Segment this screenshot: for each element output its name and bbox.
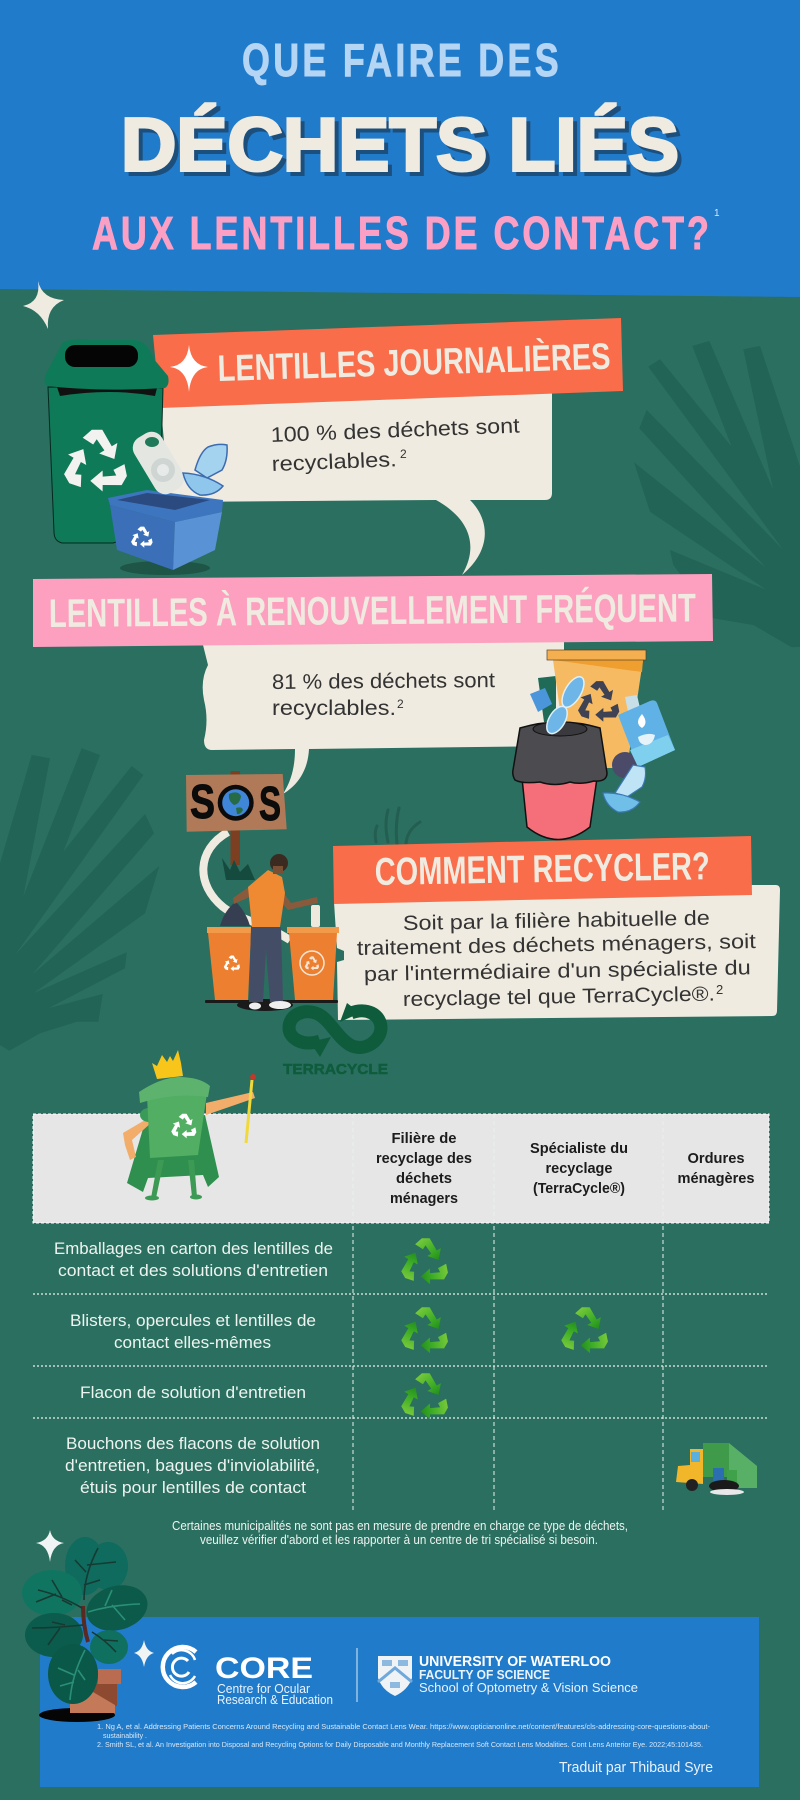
logo: University of Waterloo: FACULTY OF SCIENCE: [419, 1667, 550, 1682]
sparkle above plant: [36, 1530, 64, 1562]
body text: traitement des déchets ménagers, soit: [357, 930, 756, 960]
logo: CORE: Research & Education: [217, 1692, 333, 1707]
recycle sign: [168, 1114, 198, 1141]
sparkle near logo: [134, 1640, 154, 1667]
legs: [145, 1160, 202, 1200]
logo: TerraCycle: [283, 1003, 388, 1078]
sparkle top left: [23, 281, 64, 329]
board: [186, 774, 287, 832]
table grid: [33, 1114, 769, 1511]
title line 3: AUX LENTILLES DE CONTACT?: [92, 208, 709, 259]
orange banner: [333, 836, 752, 904]
panel: footer: [40, 1617, 759, 1787]
crown: [152, 1050, 183, 1079]
icon: solution bottle: [612, 695, 675, 778]
left bin: [208, 933, 251, 1000]
cream path behind sign and man: [203, 832, 290, 940]
body text: 2: [397, 697, 404, 711]
arm left: [123, 1117, 152, 1160]
recycle icons: [396, 1238, 611, 1424]
logo: TerraCycle: TERRACYCLE: [283, 1062, 388, 1078]
column heading 2: Spécialiste du: [530, 1140, 628, 1157]
column heading 1: ménagers: [390, 1190, 458, 1207]
shadow: [39, 1708, 115, 1722]
pencil: [246, 1080, 252, 1143]
panel: daily lenses: [153, 318, 623, 575]
logo: CORE: CORE: [215, 1652, 313, 1685]
icon: pink bin with black bag: [513, 722, 607, 840]
row labels: Bouchons des flacons de solution: [66, 1434, 320, 1453]
shoulder: [140, 1108, 158, 1122]
table header background: [33, 1114, 769, 1223]
column heading 3: Ordures: [688, 1150, 744, 1167]
logo: University of Waterloo: School of Optometry & Vision Science: [419, 1680, 638, 1695]
column heading 1: recyclage des: [376, 1150, 472, 1167]
row labels: Emballages en carton des lentilles de: [54, 1239, 333, 1258]
row labels: Flacon de solution d'entretien: [80, 1383, 306, 1402]
bottle: [311, 905, 320, 927]
arm right: [206, 1092, 255, 1115]
references: [97, 1722, 711, 1749]
stem: [83, 1606, 88, 1642]
column heading 3: [678, 1150, 754, 1187]
panel: frequent replacement lenses: [33, 574, 713, 794]
letters: S: [259, 778, 281, 831]
light leaf veins: [58, 1590, 140, 1700]
body text: 81 % des déchets sont: [272, 669, 495, 694]
table: [33, 1114, 769, 1511]
note: Certaines municipalités ne sont pas en mesure de prendre en charge ce type de déchets,: [172, 1519, 628, 1533]
globe: [218, 785, 254, 821]
pink banner: [33, 574, 713, 647]
leaves: [22, 1537, 153, 1704]
heading: LENTILLES JOURNALIÈRES: [217, 336, 611, 389]
illustration: potted plant: [22, 1537, 153, 1722]
translator credit: Traduit par Thibaud Syre: [559, 1759, 713, 1776]
column heading 3: ménagères: [678, 1170, 754, 1187]
icon: lens case: [183, 444, 227, 495]
ground shadow: [205, 1000, 338, 1003]
mascot: recycling bin superhero: [123, 1050, 256, 1200]
cape: [127, 1115, 219, 1192]
grass: [375, 808, 420, 844]
sparkle: [170, 345, 208, 392]
arms: [233, 887, 254, 904]
icon: garbage truck: [676, 1443, 757, 1495]
row labels: d'entretien, bagues d'inviolabilité,: [65, 1456, 320, 1475]
references: 1. Ng A, et al. Addressing Patients Concerns Around Recycling and Sustainable Contact Lens Wear. https://www.opticianonline.net/content/features/cls-addressing-core-questions-about-: [97, 1722, 711, 1731]
body text: par l'intermédiaire d'un spécialiste du: [364, 956, 751, 986]
references: 2. Smith SL, et al. An Investigation into Disposal and Recycling Options for Daily Disposable and Monthly Replacement Soft Contact Lens Modalities. Cont Lens Anterior Eye. 2022;45:101435.: [97, 1740, 703, 1749]
speech box: [334, 885, 780, 1020]
body text: [272, 669, 495, 720]
panel: how to recycle: [333, 836, 780, 1020]
body text: 100 % des déchets sont: [270, 414, 520, 447]
icon: yellow recycling bin: [530, 650, 646, 768]
pot: [70, 1669, 121, 1713]
post: [230, 771, 240, 865]
orange banner: [153, 318, 623, 408]
body text: recyclables.: [272, 697, 396, 720]
divider: [356, 1648, 358, 1702]
title line 2: DÉCHETS LIÉS: [121, 102, 679, 186]
body text: 2: [716, 982, 723, 997]
title line 1: QUE FAIRE DES: [242, 35, 559, 86]
icon: green recycling bin: [44, 339, 169, 543]
row labels: étuis pour lentilles de contact: [80, 1478, 306, 1497]
legs: [249, 927, 283, 1002]
lid: [139, 1077, 210, 1103]
title reference: 1: [714, 208, 720, 219]
column heading 1: déchets: [396, 1170, 452, 1187]
logo: University of Waterloo: [378, 1654, 638, 1696]
icon: blue recycling bin: [108, 490, 223, 575]
column heading 2: (TerraCycle®): [533, 1180, 625, 1197]
note: [172, 1519, 628, 1547]
logo: CORE: [163, 1647, 333, 1707]
illustration: man sorting waste: [205, 854, 339, 1011]
logo: University of Waterloo: UNIVERSITY OF WATERLOO: [419, 1654, 611, 1670]
title line 2: DÉCHETS LIÉS: [125, 106, 683, 190]
icon: lens case open: [603, 765, 646, 812]
bush: [222, 858, 255, 880]
row labels: contact et des solutions d'entretien: [58, 1261, 328, 1280]
body text: recyclables.: [271, 448, 397, 476]
speech box: [202, 640, 564, 794]
row labels: Blisters, opercules et lentilles de: [70, 1311, 316, 1330]
decorative palm leaves left: [0, 748, 159, 1051]
column heading 1: Filière de: [392, 1130, 456, 1147]
note: veuillez vérifier d'abord et les rapporter à un centre de tri spécialisé si besoin.: [200, 1533, 598, 1547]
body text: Soit par la filière habituelle de: [403, 907, 710, 935]
letters: S: [190, 776, 215, 829]
body text: [270, 414, 520, 476]
header band: [0, 0, 800, 297]
icon: blister strip: [543, 673, 588, 737]
references: sustainability .: [103, 1731, 147, 1740]
trash bag: [220, 902, 250, 926]
dark leaf veins: [32, 1548, 118, 1652]
column heading 1: [376, 1130, 472, 1207]
torso: [248, 870, 285, 927]
decorative palm leaves top right: [634, 341, 800, 647]
icon: blister pack: [128, 427, 189, 499]
body text: 2: [400, 447, 407, 461]
body: [147, 1093, 207, 1158]
head: [270, 854, 288, 872]
column heading 2: [530, 1140, 628, 1197]
speech box: [160, 385, 552, 575]
body text: recyclage tel que TerraCycle®.: [403, 983, 715, 1011]
shoes: [249, 1002, 261, 1010]
row labels: [54, 1239, 333, 1497]
letters: [190, 776, 281, 831]
logo: CORE: Centre for Ocular: [217, 1681, 311, 1696]
row labels: contact elles-mêmes: [114, 1333, 271, 1352]
body text: [357, 907, 756, 1011]
column heading 2: recyclage: [546, 1160, 612, 1177]
right bin: [289, 933, 337, 1000]
icon: SOS sign: [186, 771, 287, 880]
